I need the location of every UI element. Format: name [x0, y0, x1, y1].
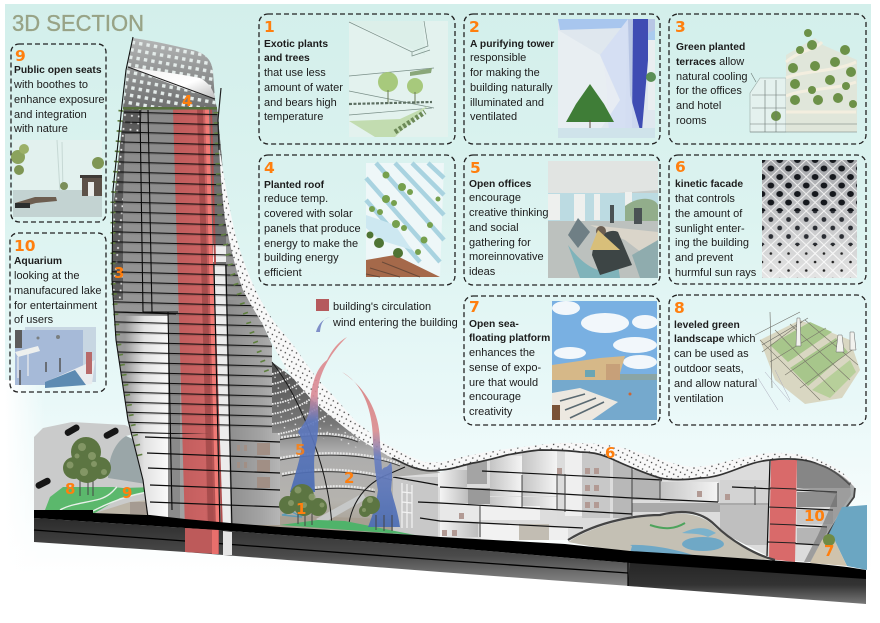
panel 9: [11, 44, 106, 222]
trees: [63, 437, 392, 531]
text: outdoor seats,: [674, 363, 744, 375]
interior door marks: [442, 468, 730, 536]
text: Exotic plants: [264, 39, 328, 50]
slab lines: [393, 471, 837, 545]
panel 6: [669, 155, 866, 284]
brown columns of lower floors: [237, 443, 270, 488]
panel 8: [669, 295, 866, 425]
perforated sweeping skin: [219, 145, 855, 488]
text: responsible: [470, 52, 526, 64]
text: ideas: [469, 266, 496, 278]
basement black slab and grey levels: [34, 510, 866, 604]
text: enhances the: [469, 347, 535, 359]
text: ventilated: [470, 111, 517, 123]
title: 3D SECTION: [12, 10, 144, 36]
thumbnail: glass tower: [558, 19, 656, 138]
numbered markers on building: 3: [114, 264, 124, 282]
numbered markers on building: 4: [182, 92, 192, 110]
text: that controls: [675, 193, 735, 205]
text: can be used as: [674, 348, 749, 360]
text: building energy: [264, 252, 339, 264]
numbered markers on building: 9: [122, 484, 132, 502]
text: Aquarium: [14, 256, 62, 267]
text: illuminated and: [470, 97, 544, 109]
numbered markers on building: 6: [605, 444, 615, 462]
text: for entertainment: [14, 300, 97, 312]
plume 1: [290, 337, 347, 492]
text: ing the building: [675, 237, 749, 249]
text: kinetic facade: [675, 179, 743, 190]
numbered markers on building: 8: [65, 480, 75, 498]
ramp: [316, 493, 366, 524]
number: 5: [470, 159, 481, 177]
text: and hotel: [676, 100, 721, 112]
text: for making the: [470, 67, 540, 79]
panel 2: [464, 14, 660, 144]
text: temperature: [264, 111, 323, 123]
text: that use less: [264, 67, 326, 79]
text: building naturally: [470, 82, 553, 94]
right core: [769, 460, 797, 562]
text: manufacured lake: [14, 285, 101, 297]
text: creativity: [469, 406, 513, 418]
text: ventilation: [674, 393, 724, 405]
text: moreinnovative: [469, 251, 544, 263]
text: energy to make the: [264, 238, 358, 250]
wind plumes: [290, 337, 400, 527]
panel 5: [464, 155, 660, 285]
thumbnail: planted interior sketch: [349, 21, 448, 137]
legend: wind entering the building: [332, 317, 458, 329]
text: Public open seats: [14, 65, 102, 76]
right end skin: [797, 460, 855, 562]
right wing: [226, 304, 280, 525]
thumbnail: open office: [548, 161, 658, 278]
text: and prevent: [675, 252, 733, 264]
panel 3: [669, 14, 866, 144]
number: 4: [264, 159, 275, 177]
sea and island at right end: [810, 505, 867, 570]
numbered markers on building: 1: [296, 500, 306, 518]
panel 1: [259, 14, 455, 144]
text: A purifying tower: [470, 39, 554, 50]
thumbnail: aquarium: [15, 327, 96, 388]
text: the amount of: [675, 208, 743, 220]
thumbnail: terraced seating: [755, 312, 860, 410]
icon: cars: [35, 423, 120, 490]
legend: building's circulation: [333, 301, 431, 313]
text: efficient: [264, 267, 302, 279]
left plaza with road and lawn: [34, 422, 155, 516]
thumbnail: open seats on plaza: [11, 140, 104, 217]
tower: [112, 108, 280, 525]
text: gathering for: [469, 237, 531, 249]
light lower units: [126, 316, 168, 517]
numbered markers on building: 7: [824, 542, 834, 560]
text: natural cooling: [676, 71, 748, 83]
text: Planted roof: [264, 180, 325, 191]
tower roof canopy: [112, 37, 221, 518]
text: looking at the: [14, 270, 79, 282]
circulation core: [173, 108, 219, 530]
text: panels that produce: [264, 223, 361, 235]
thumbnail: sea platform: [552, 301, 658, 420]
number: 1: [264, 18, 275, 36]
text: and bears high: [264, 97, 337, 109]
text: landscape which: [674, 333, 756, 345]
text: enhance exposure: [14, 94, 105, 106]
text: Open offices: [469, 179, 532, 190]
icon: wind: [316, 317, 331, 332]
thumbnail: kinetic facade: [762, 160, 857, 278]
number: 9: [15, 47, 26, 65]
text: and allow natural: [674, 378, 757, 390]
text: hurmful sun rays: [675, 267, 757, 279]
text: and integration: [14, 109, 87, 121]
number: 7: [469, 298, 480, 316]
panel 7: [464, 296, 660, 425]
text: terraces allow: [676, 56, 744, 68]
text: and social: [469, 222, 519, 234]
structural arcs: [272, 362, 405, 530]
atrium floor: [232, 516, 440, 537]
text: with nature: [13, 123, 68, 135]
sea platform under the building: [568, 512, 775, 560]
text: with boothes to: [13, 79, 88, 91]
green balconies: [113, 110, 268, 460]
number: 3: [675, 18, 686, 36]
lawn in atrium: [280, 520, 415, 535]
text: Open sea-: [469, 319, 519, 330]
text: encourage: [469, 391, 521, 403]
curved balcony railings: [272, 364, 326, 434]
lower floor slabs: [145, 437, 280, 507]
text: for the offices: [676, 85, 742, 97]
numbered markers on building: 5: [295, 441, 305, 459]
text: leveled green: [674, 320, 740, 331]
text: rooms: [676, 115, 707, 127]
thumbnail: green building sketch: [750, 29, 857, 132]
number: 2: [469, 18, 480, 36]
white service column: [214, 265, 231, 530]
text: Green planted: [676, 42, 745, 53]
atrium behind the sweeping skin: [232, 362, 440, 538]
numbered markers on building: 10: [804, 507, 825, 525]
thumbnail: planted roof: [366, 163, 444, 277]
number: 6: [675, 158, 686, 176]
right upper section: [208, 108, 226, 308]
text: amount of water: [264, 82, 343, 94]
numbered markers on building: 2: [344, 469, 354, 487]
panel 4: [259, 155, 455, 285]
text: reduce temp.: [264, 193, 328, 205]
number: 8: [674, 299, 685, 317]
text: ure that would: [469, 377, 538, 389]
perforated left strip: [112, 110, 142, 300]
text: of users: [14, 314, 54, 326]
atrium galleries: [278, 434, 400, 490]
legend: [316, 299, 458, 332]
text: sense of expo-: [469, 362, 541, 374]
plume 2: [342, 372, 400, 527]
text: covered with solar: [264, 208, 353, 220]
number: 10: [14, 237, 36, 255]
text: sunlight enter-: [675, 223, 745, 235]
numbered markers on building: [65, 92, 834, 560]
low building body: [393, 445, 855, 565]
text: floating platform: [469, 333, 550, 344]
text: and trees: [264, 53, 310, 64]
text: encourage: [469, 192, 521, 204]
lattice: [402, 483, 412, 528]
panel 10: [10, 233, 106, 392]
text: creative thinking: [469, 207, 548, 219]
